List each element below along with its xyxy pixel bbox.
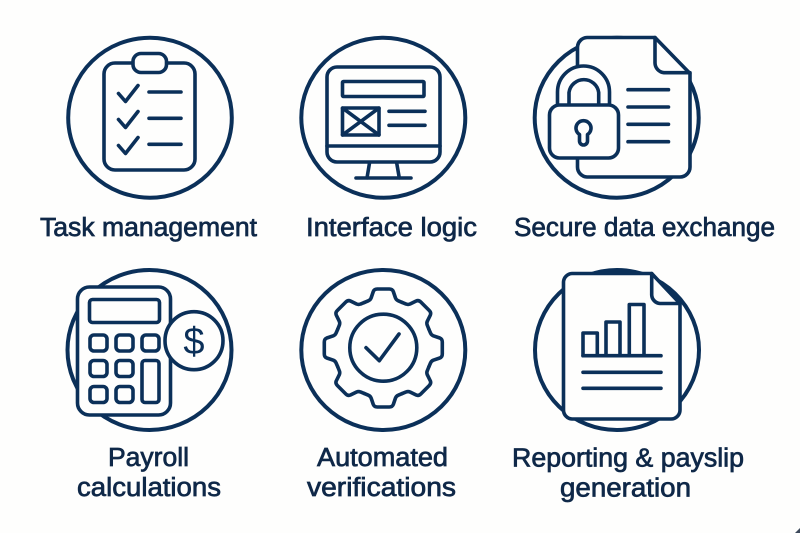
icon: task management clipboard: [68, 38, 232, 198]
label: payroll calculations: [77, 444, 221, 502]
icon: verification gear with check: [301, 270, 465, 430]
icon: report document with bar chart: [535, 270, 699, 430]
label: automated verifications: [307, 444, 456, 502]
label: task management: Task management: [40, 214, 257, 242]
label: reporting and payslip generation: generation: [560, 474, 691, 502]
label: payroll calculations: Payroll: [108, 444, 189, 472]
icon: dollar sign: $: [183, 321, 205, 363]
label: automated verifications: Automated: [317, 444, 448, 472]
label: interface logic: Interface logic: [306, 214, 477, 242]
label: secure data exchange: Secure data exchange: [514, 214, 775, 242]
label: payroll calculations: calculations: [77, 474, 221, 502]
icon: secure data document and padlock: [535, 38, 699, 198]
label: reporting and payslip generation: [512, 444, 744, 502]
icon: interface monitor: [301, 38, 465, 198]
icon: payroll calculator with dollar coin: [68, 270, 232, 430]
label: reporting and payslip generation: Reporting & payslip: [512, 444, 744, 472]
label: automated verifications: verifications: [307, 474, 456, 502]
